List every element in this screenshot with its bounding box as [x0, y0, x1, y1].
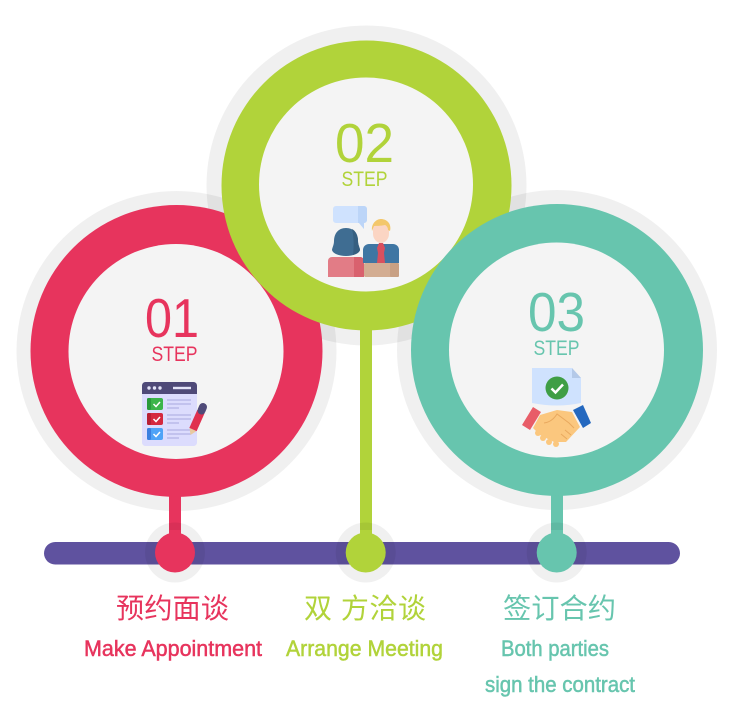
panel: step 3 circle — [411, 204, 703, 540]
timeline bar — [44, 542, 680, 564]
step 3 caption: STEP — [534, 337, 580, 360]
step 1 number: 01 — [145, 287, 199, 349]
label: step 2 Chinese: 双 方洽谈 — [304, 593, 426, 624]
node: step 1 — [145, 522, 205, 582]
icon: checklist with pencil — [142, 382, 203, 446]
label: step 1 Chinese: 预约面谈 — [116, 593, 229, 624]
node: step 2 — [336, 522, 396, 582]
step 1 caption: STEP — [152, 343, 198, 366]
step 2 number: 02 — [335, 112, 394, 174]
label: step 3 English — [485, 636, 635, 697]
label: step 3 Chinese: 签订合约 — [503, 593, 616, 624]
panel: step 2 circle — [222, 40, 512, 540]
step 2 caption: STEP — [342, 168, 388, 191]
panel: step 1 circle — [30, 205, 322, 540]
icon: contract and handshake — [522, 368, 591, 447]
icon: two people meeting — [328, 206, 399, 277]
label: step 1 English: Make Appointment — [84, 636, 262, 661]
step 3 number: 03 — [528, 281, 585, 343]
label: step 3 English: Both parties — [501, 636, 609, 661]
node: step 3 — [527, 522, 587, 582]
circle halos — [16, 26, 717, 511]
label: step 3 English: sign the contract — [485, 672, 635, 697]
label: step 2 English: Arrange Meeting — [286, 636, 443, 661]
